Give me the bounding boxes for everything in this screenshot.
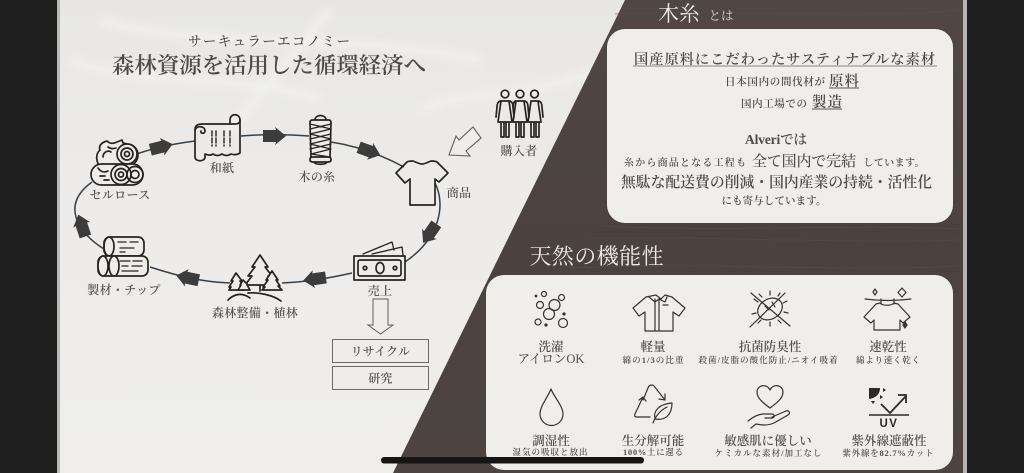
heading: what is wood thread: とは — [708, 9, 734, 23]
icon: UV shield: UV — [880, 418, 898, 430]
hollow arrow to product — [449, 127, 481, 156]
icon: washi scroll — [195, 115, 240, 161]
icon: water drop — [540, 389, 563, 426]
icon: shirt — [633, 295, 685, 331]
label: forest maintenance: 森林整備・植林 — [212, 305, 298, 320]
panel: about wood thread: 製造 — [812, 93, 842, 111]
panel: about wood thread: 原料 — [829, 72, 860, 90]
heading: natural functions: 天然の機能性 — [530, 244, 664, 269]
left heading — [112, 34, 426, 78]
subtitle: サーキュラーエコノミー — [188, 34, 350, 49]
icon: forest — [228, 255, 282, 301]
feature: biodegradable: 生分解可能 — [622, 433, 684, 448]
icon: cellulose logs — [91, 140, 143, 185]
feature: quick dry — [856, 288, 920, 365]
home indicator bar — [381, 457, 644, 464]
feature: moisture control — [512, 389, 588, 457]
label: product: 商品 — [447, 186, 471, 200]
main title: 森林資源を活用した循環経済へ — [112, 53, 426, 78]
box: recycle — [332, 340, 428, 362]
feature: washable: 洗濯 — [538, 339, 564, 354]
feature: gentle on skin: ケミカルな素材/加工なし — [714, 448, 822, 458]
icon: thread spool — [310, 116, 331, 164]
feature: lightweight: 軽量 — [640, 339, 666, 354]
label: purchasers: 購入者 — [501, 143, 537, 158]
icon: lumber logs — [98, 237, 148, 276]
feature: biodegradable: 100%土に還る — [623, 447, 683, 457]
domestic production line: 糸から商品となる工程も — [624, 156, 746, 169]
panel: about wood thread — [607, 29, 953, 223]
feature: moisture control: 調湿性 — [532, 433, 570, 448]
heading: what is wood thread: 木糸 — [658, 2, 700, 26]
feature: UV protection: 紫外線遮蔽性 — [851, 433, 927, 448]
feature: antibacterial: 抗菌防臭性 — [739, 339, 802, 354]
feature: UV protection — [842, 388, 934, 458]
feature: antibacterial — [698, 291, 838, 365]
panel: about wood thread: しています。 — [864, 157, 924, 169]
icon: purchasers — [496, 90, 543, 137]
feature: moisture control: 湿気の吸収と放出 — [512, 447, 588, 457]
feature: gentle on skin: 敏感肌に優しい — [724, 433, 812, 448]
closing line: にも寄与しています。 — [722, 194, 826, 207]
icon: crossed germ — [750, 291, 790, 327]
box: research — [332, 366, 428, 390]
label: washi: 和紙 — [210, 160, 234, 175]
label: sales: 売上 — [368, 283, 392, 298]
right dark diagonal panel — [393, 0, 963, 473]
box: recycle: リサイクル — [351, 344, 410, 358]
icon: bubbles — [535, 292, 568, 328]
feature: antibacterial: 殺菌/皮脂の酸化防止/ニオイ吸着 — [698, 355, 838, 365]
feature: quick dry: 速乾性 — [869, 339, 907, 354]
box: research: 研究 — [368, 370, 393, 386]
hollow down arrow — [368, 299, 393, 334]
feature: quick dry: 綿より速く乾く — [856, 355, 920, 365]
benefit line: 無駄な配送費の削減・国内産業の持続・活性化 — [621, 173, 932, 191]
feature: biodegradable — [622, 385, 684, 457]
panel: natural functions — [486, 275, 953, 470]
icon: heart in hand — [748, 386, 789, 428]
icon: money — [354, 242, 405, 280]
panel: about wood thread: 全て国内で完結 — [752, 152, 856, 170]
feature: washable: アイロンOK — [518, 352, 584, 366]
flow arrows — [70, 127, 444, 290]
label: wood thread: 木の糸 — [299, 169, 336, 184]
raw material line: 日本国内の間伐材が — [725, 75, 826, 88]
manufacturing line: 国内工場での — [741, 97, 807, 110]
circular flow ring — [75, 134, 440, 283]
feature: washable — [518, 292, 584, 366]
feature: UV protection: 紫外線を82.7%カット — [842, 448, 934, 458]
label: cellulose: セルロース — [90, 188, 150, 202]
feature: lightweight: 綿の1/3の比重 — [622, 355, 684, 365]
icon: t-shirt product — [396, 161, 448, 205]
Alveri line: Alveriでは — [745, 132, 807, 147]
heading: what is wood thread — [658, 2, 734, 26]
icon: drying t-shirt — [864, 288, 911, 330]
card heading: 国産原料にこだわったサスティナブルな素材 — [634, 50, 935, 68]
feature: lightweight — [622, 295, 685, 365]
label: lumber and chips: 製材・チップ — [87, 282, 161, 297]
icon: recycle leaf — [635, 385, 672, 423]
feature: gentle on skin — [714, 386, 822, 458]
